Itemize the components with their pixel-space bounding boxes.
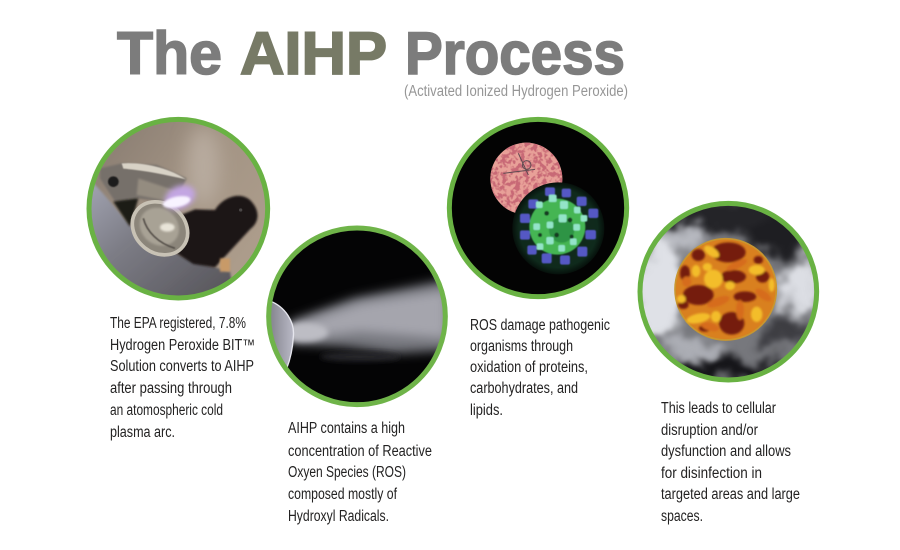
title: The [117,20,222,87]
text block: step 2: concentration of Reactive [288,443,432,460]
text block: step 4 [661,400,800,525]
red cell [490,143,562,215]
text block: step 4: disruption and/or [661,422,758,439]
text block: step 3: oxidation of proteins, [470,359,588,376]
mist plume [290,278,453,353]
text block: step 4: targeted areas and large [661,486,800,503]
yellow rods [677,243,775,325]
text block: step 2: AIHP contains a high [288,420,405,437]
dark red patches [678,242,769,335]
text block: step 2: composed mostly of [288,486,398,503]
pale fog [637,228,820,361]
circle 2: hydrogen peroxide mist [267,228,453,405]
text block: step 2 [288,420,432,525]
text block: step 3 [470,317,610,419]
circle 1: cold plasma arc photo [80,119,268,310]
text block: step 4: dysfunction and allows [661,443,791,460]
text block: step 4: for disinfection in [661,465,762,482]
black electrode [177,196,257,267]
metal bracket [100,163,187,202]
text block: step 3: carbohydrates, and [470,380,578,397]
bacteria dish [675,239,776,340]
dark dots [538,211,574,239]
title [117,20,625,87]
silver ring nozzle [130,200,190,257]
text block: step 2: Hydroxyl Radicals. [288,508,389,525]
text block: step 2: Oxyen Species (ROS) [288,464,406,481]
text block: step 3: lipids. [470,402,503,419]
text block: step 4: spaces. [661,508,703,525]
text block: step 1: The EPA registered, 7.8% [110,315,246,332]
title: AIHP [240,20,387,87]
black shadow [113,198,138,227]
title: Process [405,20,625,87]
text block: step 1 [110,315,255,441]
text block: step 1: Solution converts to AIHP [110,358,254,375]
text block: step 3: organisms through [470,338,573,355]
text block: step 4: This leads to cellular [661,400,776,417]
orange rods [682,257,773,333]
subtitle: (Activated Ionized Hydrogen Peroxide) [404,83,628,100]
virus [512,182,604,274]
plasma arc [162,182,198,213]
text block: step 1: after passing through [110,380,232,397]
text block: step 1: an atomospheric cold [110,402,223,419]
orange reflection [220,258,230,272]
text block: step 1: plasma arc. [110,424,175,441]
nozzle [271,301,294,368]
text block: step 3: ROS damage pathogenic [470,317,610,334]
dark smoke [667,206,808,378]
blue spikes [520,187,598,265]
bright light haze [187,127,220,207]
circle 3: pathogen and virus [449,119,627,297]
circle 4: bacteria disrupted in fog [637,195,820,383]
cyan tips [533,195,587,252]
text block: step 1: Hydrogen Peroxide BIT™ [110,337,255,354]
metal bowl [92,184,232,296]
